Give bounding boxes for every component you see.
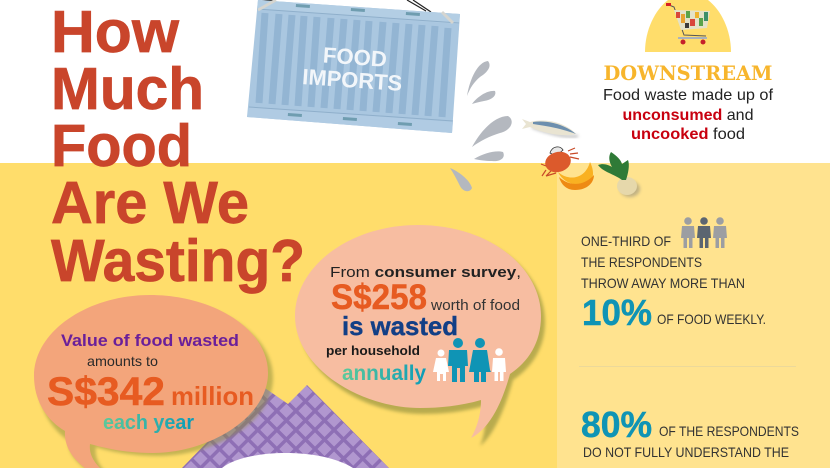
callout text: worth of food [430, 297, 520, 314]
text block: one-third of respondents [581, 233, 766, 333]
text block: one-third of respondents: OF FOOD WEEKLY. [657, 311, 766, 327]
callout text [326, 264, 521, 385]
text block: 80 percent of respondents: DO NOT FULLY UNDERSTAND THE [583, 444, 789, 460]
title [51, 0, 305, 294]
container label [302, 41, 405, 96]
text block: one-third of respondents: THE RESPONDENTS [581, 254, 702, 270]
text block: downstream description [603, 87, 774, 143]
background: yellow lower area [0, 163, 830, 468]
icon: family of four [433, 338, 506, 382]
text block: 80 percent of respondents [581, 404, 799, 460]
title: Much [51, 56, 204, 122]
purple woven placemat [182, 385, 389, 468]
callout text [47, 331, 254, 434]
callout: consumer survey [295, 225, 545, 446]
callout text: Value of food wasted [61, 331, 239, 350]
panel: pale yellow right column [557, 163, 830, 468]
text block: one-third of respondents: THROW AWAY MORE THAN [581, 275, 745, 291]
icon: shopping cart on yellow semicircle [645, 0, 731, 52]
title: Are We [51, 170, 249, 236]
text block: 80 percent of respondents: OF THE RESPONDENTS [659, 423, 799, 439]
callout text: amounts to [87, 353, 158, 369]
text block: 80 percent of respondents: 80% [581, 404, 652, 445]
text block: downstream description: unconsumed and [622, 107, 754, 124]
title: Food [51, 113, 192, 179]
text block: downstream description: Food waste made up of [603, 87, 774, 104]
icon: bananas [558, 162, 594, 190]
title: How [51, 0, 179, 65]
text block: one-third of respondents: ONE-THIRD OF [581, 233, 671, 249]
heading: downstream: DOWNSTREAM [604, 61, 772, 85]
callout text: each year [103, 412, 194, 434]
callout text: million [171, 381, 254, 411]
callout text: From consumer survey , [330, 264, 521, 281]
icon: food imports shipping container [247, 0, 460, 133]
callout: value of food wasted [34, 295, 273, 468]
callout text: per household [326, 343, 420, 358]
container label: IMPORTS [302, 64, 403, 96]
text block: one-third of respondents: 10% [582, 292, 652, 333]
icon: crab [541, 147, 579, 176]
callout text: S$258 [331, 278, 427, 317]
title: Wasting? [51, 228, 305, 294]
callout text: annually [342, 362, 426, 385]
callout text: S$342 [47, 370, 165, 414]
container label: FOOD [322, 42, 388, 72]
icon: three people [681, 217, 727, 248]
icon: grey splash drops [450, 61, 512, 191]
text block: downstream description: uncooked food [631, 126, 745, 143]
icon: fish [522, 119, 578, 136]
callout text: is wasted [342, 311, 458, 341]
icon: leafy root vegetable [598, 152, 640, 197]
